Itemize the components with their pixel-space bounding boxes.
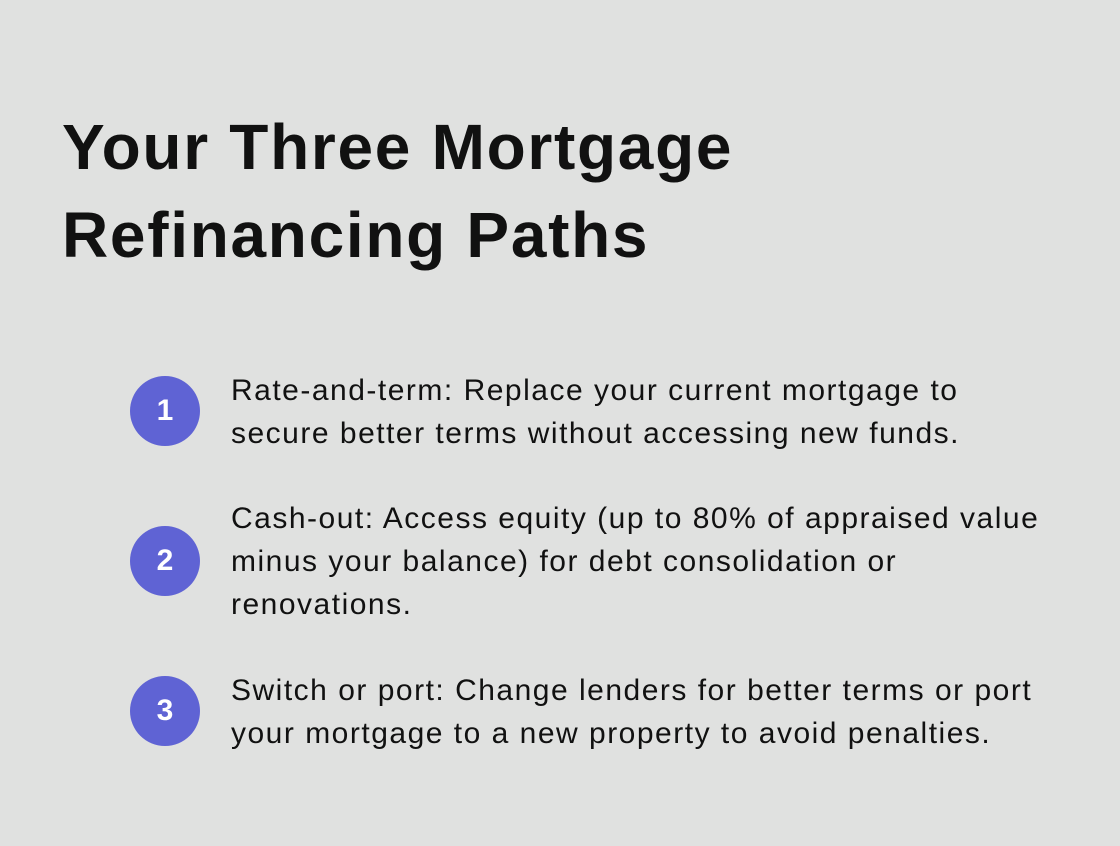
icon: number 3 circle: 3 [157,694,173,727]
title [62,111,733,271]
icon: number 1 circle [130,376,200,446]
icon: number 3 circle [130,676,200,746]
text: switch or port [231,674,1032,750]
text: cash-out [231,502,1039,621]
text: rate-and-term [231,374,960,450]
item 2 [130,502,1039,621]
text: cash-out: renovations. [231,588,412,621]
icon: number 2 circle: 2 [157,544,173,577]
text: cash-out: Cash-out: Access equity (up to 80% of appraised value [231,502,1039,535]
title: Your Three Mortgage [62,111,733,183]
text: cash-out: minus your balance) for debt consolidation or [231,545,897,578]
text: rate-and-term: Rate-and-term: Replace your current mortgage to [231,374,958,407]
item 3 [130,674,1032,750]
text: switch or port: your mortgage to a new property to avoid penalties. [231,717,991,750]
title: Refinancing Paths [62,199,649,271]
item 1 [130,374,960,450]
text: switch or port: Switch or port: Change lenders for better terms or port [231,674,1032,707]
icon: number 2 circle [130,526,200,596]
text: rate-and-term: secure better terms without accessing new funds. [231,417,960,450]
icon: number 1 circle: 1 [157,394,173,427]
